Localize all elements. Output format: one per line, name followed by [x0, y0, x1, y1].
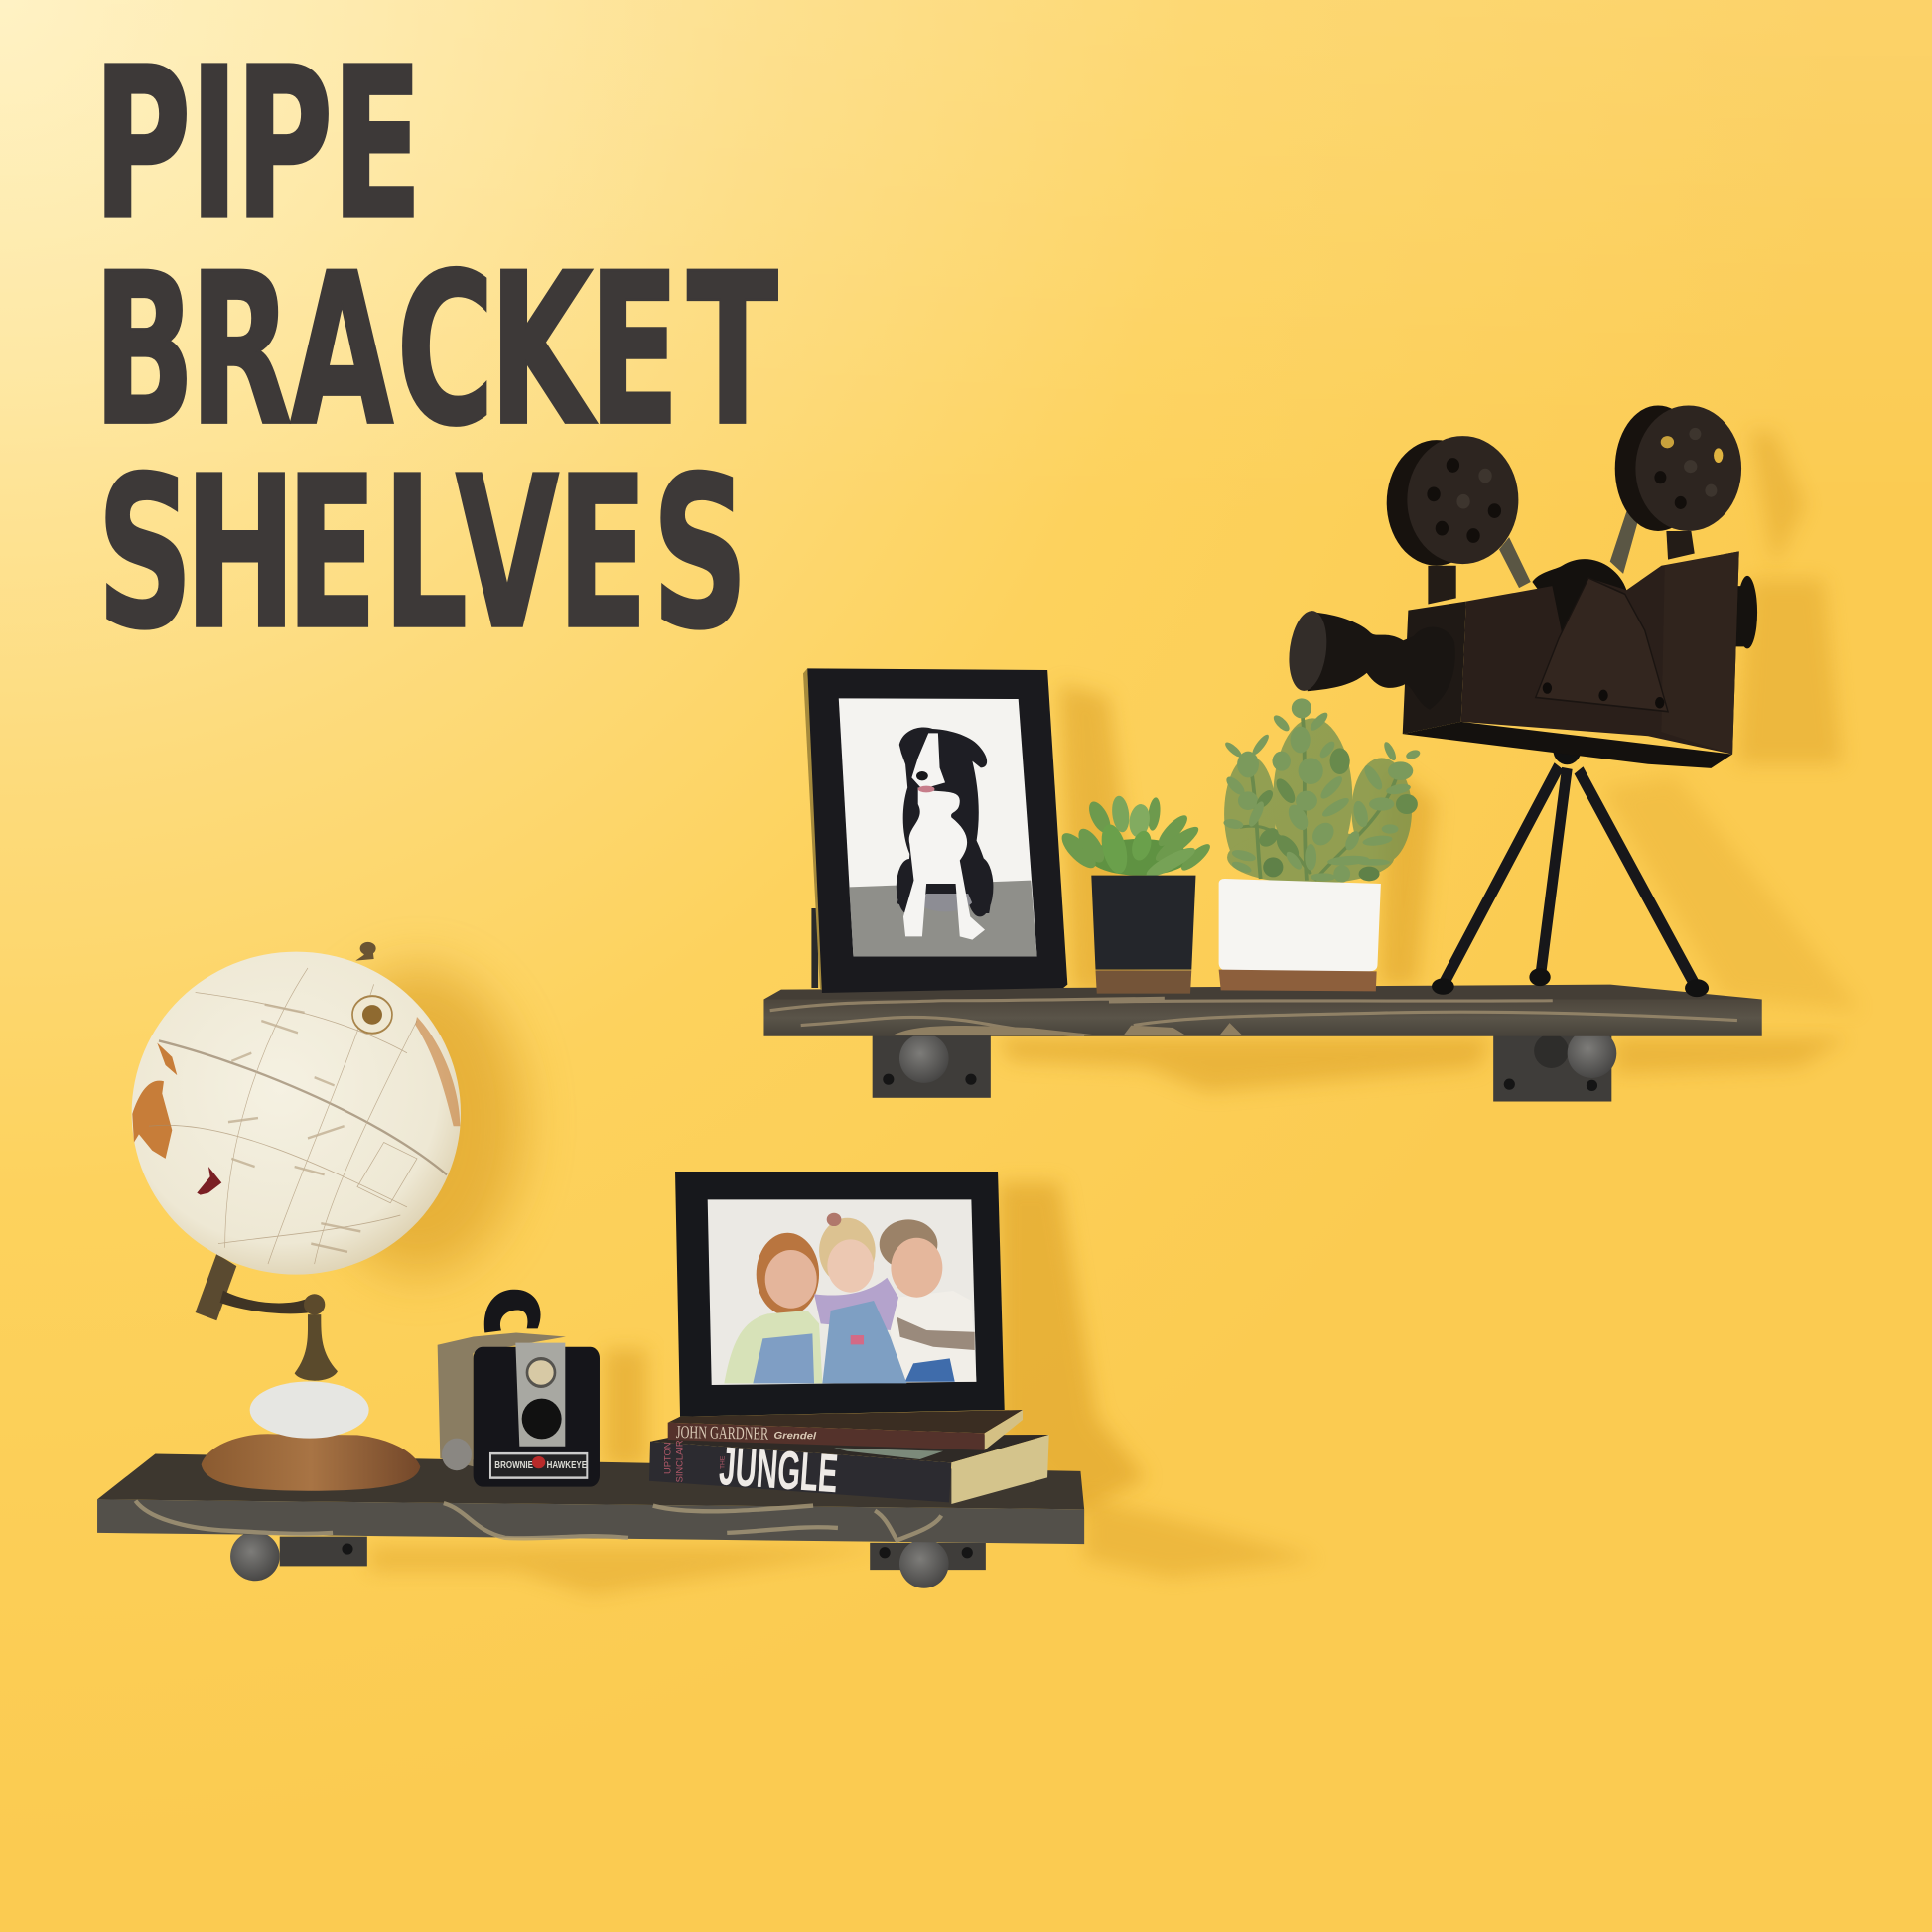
title: PIPE: [93, 23, 423, 266]
upper book: Grendel: [773, 1431, 816, 1442]
title: BRACKET: [93, 228, 778, 473]
photo ground: [849, 881, 1037, 956]
metal arm: [196, 1254, 338, 1381]
globe continents: [132, 1017, 460, 1159]
right reel: [1615, 405, 1741, 531]
child left: [724, 1233, 822, 1383]
lower book: UPTON: [662, 1443, 672, 1474]
bracket left: [230, 1532, 367, 1581]
pot: [1219, 879, 1381, 971]
top roller: [1532, 559, 1626, 634]
lower book: JUNGLE: [718, 1435, 840, 1504]
film strips: [1499, 486, 1643, 588]
lens: [1285, 607, 1455, 710]
wall shadows: [314, 431, 1861, 1595]
winder: [442, 1439, 472, 1470]
stacked books: [649, 1410, 1049, 1504]
lower shelf with brackets: [97, 1453, 1084, 1588]
upper book: [668, 1410, 1023, 1450]
front: [474, 1347, 600, 1487]
metal plate: [515, 1343, 565, 1447]
label: HAWKEYE: [547, 1459, 587, 1470]
lower book: SINCLAIR: [674, 1440, 684, 1482]
marble knob: [250, 1381, 369, 1439]
tripod: [1432, 736, 1709, 997]
pot: [1091, 876, 1195, 970]
compass rose: [352, 996, 392, 1034]
camera body: [1403, 551, 1739, 768]
reel supports: [1428, 531, 1695, 605]
side plate: [1536, 578, 1668, 712]
leafy plant in white pot: [1219, 698, 1422, 991]
upper shelf with brackets: [763, 985, 1762, 1102]
picture frame with three children: [675, 1172, 1005, 1417]
bracket right: [1493, 1029, 1616, 1102]
pot base: [1219, 970, 1377, 991]
globe sphere: [132, 952, 461, 1275]
globe map lines: [149, 968, 447, 1264]
dog: [897, 727, 993, 940]
bracket right: [870, 1539, 986, 1588]
child right: [880, 1219, 976, 1382]
lower book: THE: [719, 1455, 726, 1469]
vintage box camera: [438, 1290, 600, 1487]
upper book: JOHN GARDNER: [676, 1422, 768, 1444]
top finial: [355, 942, 376, 961]
globe on stand: [132, 942, 461, 1491]
bracket left: [873, 1034, 991, 1098]
pot base: [1096, 970, 1191, 994]
label: [490, 1453, 587, 1478]
wooden base: [202, 1434, 420, 1491]
child center: [814, 1213, 906, 1383]
shelf board: [97, 1453, 1084, 1544]
side panel: [438, 1332, 566, 1466]
rear knob: [1735, 576, 1757, 648]
title: SHELVES: [96, 432, 749, 675]
strap: [484, 1290, 541, 1332]
lower book: [649, 1435, 1049, 1504]
label: BROWNIE: [494, 1459, 533, 1470]
left reel: [1387, 436, 1518, 566]
shelf board: [763, 985, 1762, 1036]
film camera on tripod: [1285, 405, 1757, 997]
title: [93, 23, 778, 675]
picture frame with dog: [803, 668, 1067, 993]
small succulent in black pot: [1055, 795, 1214, 994]
